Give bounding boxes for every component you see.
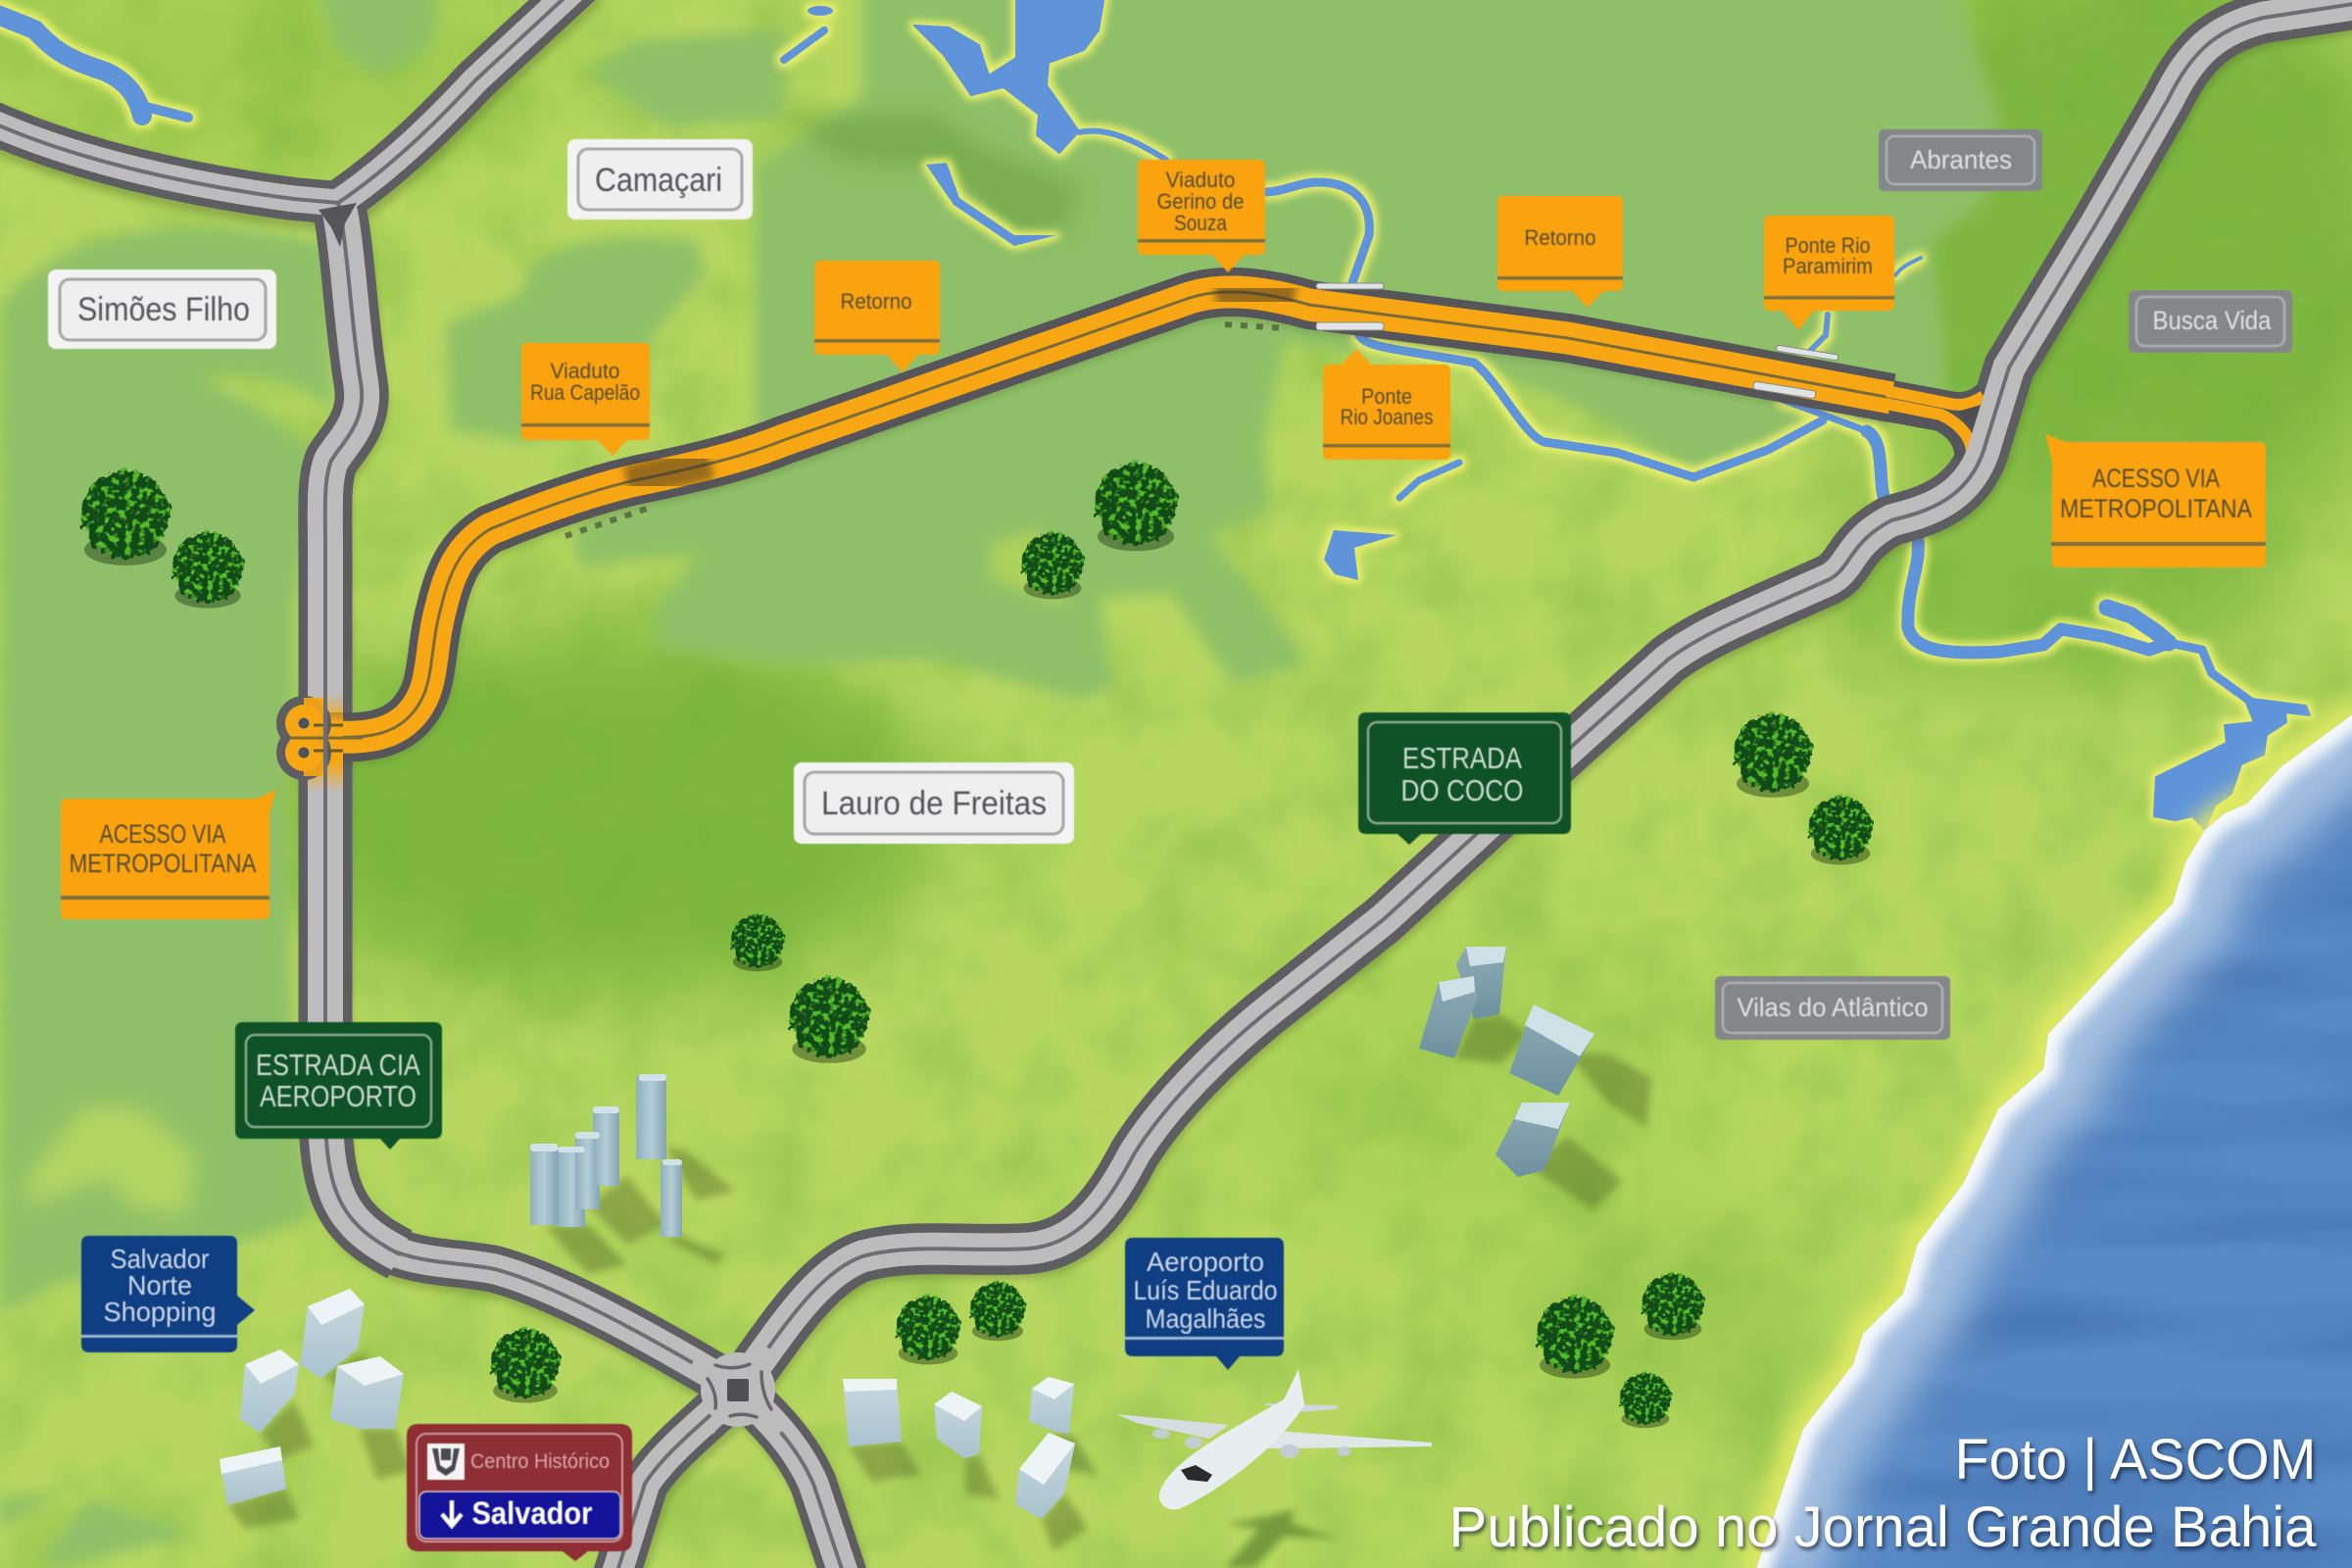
label: Simões Filho xyxy=(48,270,276,349)
label: Abrantes xyxy=(1879,129,2042,191)
sign: Viaduto Gerino de Souza: Souza xyxy=(1174,211,1228,235)
blue-grey buildings xyxy=(1419,947,1594,1177)
rivers and lakes xyxy=(0,0,2310,830)
sign: Ponte Rio Paramirim: Ponte Rio xyxy=(1786,233,1870,258)
sign: Ponte Rio Joanes: Rio Joanes xyxy=(1341,405,1433,429)
sign: Acesso Via Metropolitana west: METROPOLITANA xyxy=(69,849,257,878)
sign: Retorno east: Retorno xyxy=(1525,225,1595,250)
sign: Ponte Rio Paramirim: Paramirim xyxy=(1783,254,1873,278)
sign: Acesso Via Metropolitana west: ACESSO VIA xyxy=(100,819,225,849)
sign: Viaduto Gerino de Souza: Gerino de xyxy=(1156,189,1245,214)
label: Busca Vida xyxy=(2129,290,2292,353)
sign: Aeroporto Luís Eduardo Magalhães xyxy=(1125,1238,1284,1370)
sign: Estrada Cia Aeroporto: ESTRADA CIA xyxy=(256,1048,420,1082)
sign: Aeroporto Luís Eduardo Magalhães: Aeroporto xyxy=(1147,1247,1264,1277)
label: Simões Filho: Simões Filho xyxy=(77,291,250,328)
sign: Viaduto Rua Capelão xyxy=(521,343,650,456)
label: Lauro de Freitas xyxy=(794,762,1074,844)
icon: airplane xyxy=(1116,1369,1432,1509)
label: Vilas do Atlântico xyxy=(1715,976,1950,1040)
sign: Estrada do Coco xyxy=(1358,712,1571,845)
lime patches and darker forest patch xyxy=(24,113,1078,1215)
bridges xyxy=(1316,283,1838,399)
photo credit xyxy=(1448,1428,2317,1559)
sign: Salvador Norte Shopping xyxy=(81,1236,255,1352)
sign: Acesso Via Metropolitana east xyxy=(2045,434,2266,567)
sign: Acesso Via Metropolitana west xyxy=(61,790,276,919)
label: Busca Vida: Busca Vida xyxy=(2152,306,2272,335)
sign: Viaduto Rua Capelão: Viaduto xyxy=(551,359,619,383)
label: Camaçari: Camaçari xyxy=(595,162,722,199)
sign: Viaduto Gerino de Souza: Viaduto xyxy=(1166,168,1235,192)
sign: Ponte Rio Joanes: Ponte xyxy=(1361,384,1412,409)
sign: Salvador Norte Shopping: Shopping xyxy=(104,1297,216,1327)
icon: historic centre xyxy=(427,1444,465,1480)
icon: down arrow xyxy=(442,1500,462,1526)
building shadows xyxy=(227,1014,1651,1550)
photo credit: Publicado no Jornal Grande Bahia xyxy=(1448,1495,2317,1559)
sign: Viaduto Rua Capelão: Rua Capelão xyxy=(530,380,640,405)
label: Camaçari xyxy=(567,139,753,220)
ocean xyxy=(1715,686,2352,1568)
sign: Ponte Rio Joanes xyxy=(1323,349,1450,460)
roundabout xyxy=(693,1350,779,1434)
trees xyxy=(81,463,1872,1428)
north junction xyxy=(318,203,357,247)
sign: Estrada Cia Aeroporto xyxy=(235,1022,442,1150)
sign: Acesso Via Metropolitana east: METROPOLITANA xyxy=(2060,494,2252,523)
plane shadow xyxy=(1225,1509,1338,1568)
sign: Aeroporto Luís Eduardo Magalhães: Magalhães xyxy=(1145,1303,1266,1334)
sign: Retorno west: Retorno xyxy=(841,289,911,314)
white buildings xyxy=(220,1289,1075,1519)
sign: Centro Histórico / Salvador: Centro Histórico xyxy=(470,1450,610,1473)
interchange with orange loops xyxy=(276,676,363,813)
sign: Estrada do Coco: ESTRADA xyxy=(1402,741,1522,775)
sign: Salvador Norte Shopping: Norte xyxy=(127,1270,192,1300)
right junction overlap xyxy=(1891,303,2048,520)
sign: Retorno east xyxy=(1497,196,1623,308)
viaduct shadows xyxy=(565,290,1294,536)
label: Lauro de Freitas: Lauro de Freitas xyxy=(821,785,1047,822)
label: Vilas do Atlântico: Vilas do Atlântico xyxy=(1737,993,1929,1022)
orange Via Metropolitana road xyxy=(294,292,1984,742)
sign: Salvador Norte Shopping: Salvador xyxy=(110,1244,210,1274)
towers xyxy=(530,1074,682,1237)
sign: Aeroporto Luís Eduardo Magalhães: Luís Eduardo xyxy=(1133,1275,1278,1305)
photo credit: Foto | ASCOM xyxy=(1954,1428,2317,1492)
sign: Acesso Via Metropolitana east: ACESSO VIA xyxy=(2092,464,2220,493)
sign: Ponte Rio Paramirim xyxy=(1764,216,1894,330)
sign: Viaduto Gerino de Souza xyxy=(1138,160,1265,272)
sign: Estrada Cia Aeroporto: AEROPORTO xyxy=(260,1079,416,1113)
sign: Retorno west xyxy=(814,261,940,372)
sign: Centro Histórico / Salvador: Salvador xyxy=(472,1495,592,1531)
sign: Estrada do Coco: DO COCO xyxy=(1401,773,1523,808)
label: Abrantes: Abrantes xyxy=(1910,145,2012,174)
sign: Centro Histórico / Salvador xyxy=(407,1424,632,1561)
